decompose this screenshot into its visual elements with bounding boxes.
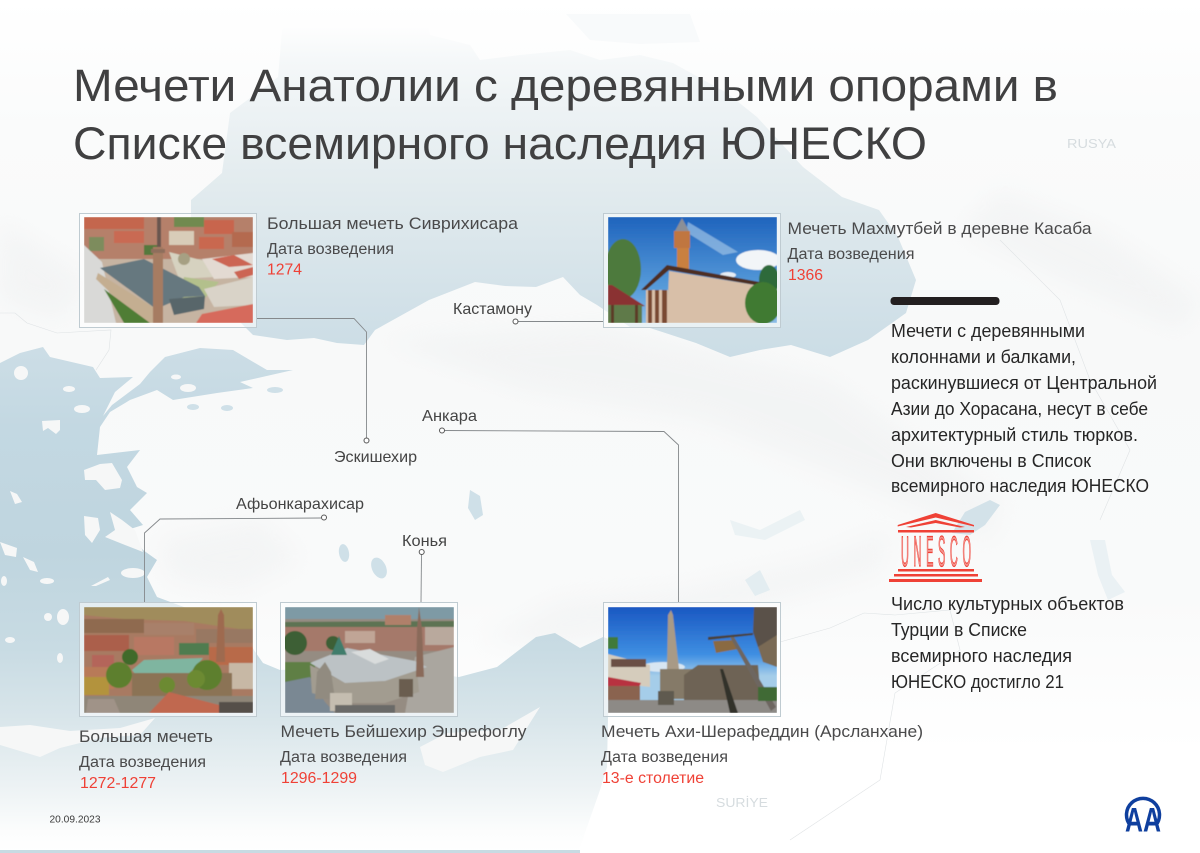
text block: about mosques: Мечети с деревянными (891, 321, 1085, 341)
sea: Black Sea (191, 20, 916, 357)
icon: AA logo (1125, 798, 1161, 840)
photo: Beyşehir Eşrefoğlu mosque (285, 607, 454, 713)
text block: UNESCO count (891, 594, 1124, 692)
photo: Mahmutbey mosque (608, 217, 777, 323)
title: Списке всемирного наследия ЮНЕСКО (73, 118, 927, 169)
bottom map strip (0, 850, 580, 853)
text block: about mosques: Азии до Хорасана, несут в себе (891, 399, 1148, 419)
text block: UNESCO count: ЮНЕСКО достигло 21 (891, 672, 1064, 692)
panel: Afyon Grand Mosque (79, 602, 256, 792)
panel: Ahi Şerafeddin mosque (601, 602, 923, 787)
photo: Sivrihisar mosque (84, 217, 253, 323)
text: date: 1296-1299 (281, 770, 357, 787)
text block: UNESCO count: Турции в Списке (891, 620, 1027, 640)
lakes (187, 387, 1125, 600)
text: date: 1366 (788, 267, 823, 284)
leader line: Afyonkarahisar (144, 496, 364, 602)
terrain shading (0, 190, 1200, 650)
label: SURİYE: SURİYE (716, 795, 768, 810)
text: Beyşehir name: Мечеть Бейшехир Эшрефоглу (280, 722, 527, 741)
icon: UNESCO logo (889, 513, 982, 582)
text: date: 13-е столетие (602, 770, 704, 787)
text block: about mosques (891, 321, 1157, 496)
icon: AA logo: AA (1125, 802, 1161, 840)
text block: about mosques: раскинувшиеся от Центральной (891, 373, 1157, 393)
text: date label: Дата возведения (79, 754, 206, 771)
borders (0, 240, 1130, 840)
leader line: Eskişehir (257, 318, 417, 466)
leader line: Konya (402, 533, 447, 602)
text: date label: Дата возведения (267, 241, 394, 258)
date stamp: 20.09.2023 (50, 814, 101, 826)
text: date label: Дата возведения (280, 749, 407, 766)
icon: UNESCO logo: UNESCO (901, 528, 971, 576)
leader line: Ankara (422, 408, 678, 602)
leader line: Konya: Конья (402, 533, 447, 550)
text: Afyon name: Большая мечеть (79, 727, 213, 746)
text block: about mosques: Они включены в Список (891, 451, 1091, 471)
text: Mahmutbey name: Мечеть Махмутбей в деревне Касаба (788, 219, 1092, 238)
text: date: 1274 (267, 262, 302, 278)
label: RUSYA: RUSYA (1067, 136, 1116, 151)
title (73, 60, 1058, 169)
leader line: Kastamonu: Кастамону (453, 301, 532, 318)
text: date label: Дата возведения (788, 246, 914, 263)
text: date label: Дата возведения (601, 749, 728, 766)
text block: UNESCO count: всемирного наследия (891, 646, 1072, 666)
panel: Beyşehir Eşrefoğlu mosque (280, 602, 527, 787)
text block: about mosques: всемирного наследия ЮНЕСКО (891, 476, 1149, 496)
text: date: 1272-1277 (80, 775, 156, 792)
text block: about mosques: архитектурный стиль тюрков. (891, 425, 1138, 445)
title: Мечети Анатолии с деревянными опорами в (73, 60, 1058, 111)
text: Ahi Şerafeddin name: Мечеть Ахи-Шерафеддин (Арсланхане) (601, 722, 923, 741)
accent bar (890, 297, 1000, 305)
photo: Afyon Grand Mosque (84, 607, 253, 713)
leader line: Eskişehir: Эскишехир (334, 449, 417, 466)
leader line: Ankara: Анкара (422, 408, 477, 425)
islands (0, 366, 540, 772)
panel: Mahmutbey mosque (604, 214, 1092, 328)
text block: about mosques: колоннами и балками, (891, 347, 1076, 367)
sea: Aegean, Marmara and Mediterranean (0, 347, 612, 853)
text: Sivrihisar name: Большая мечеть Сиврихисара (267, 214, 519, 233)
text block: UNESCO count: Число культурных объектов (891, 594, 1124, 614)
panel: Sivrihisar mosque (80, 214, 519, 328)
leader line: Afyonkarahisar: Афьонкарахисар (236, 496, 364, 513)
sea: Azov (566, 14, 700, 44)
photo: Ahi Şerafeddin mosque (608, 607, 777, 713)
leader line: Kastamonu (453, 301, 603, 324)
